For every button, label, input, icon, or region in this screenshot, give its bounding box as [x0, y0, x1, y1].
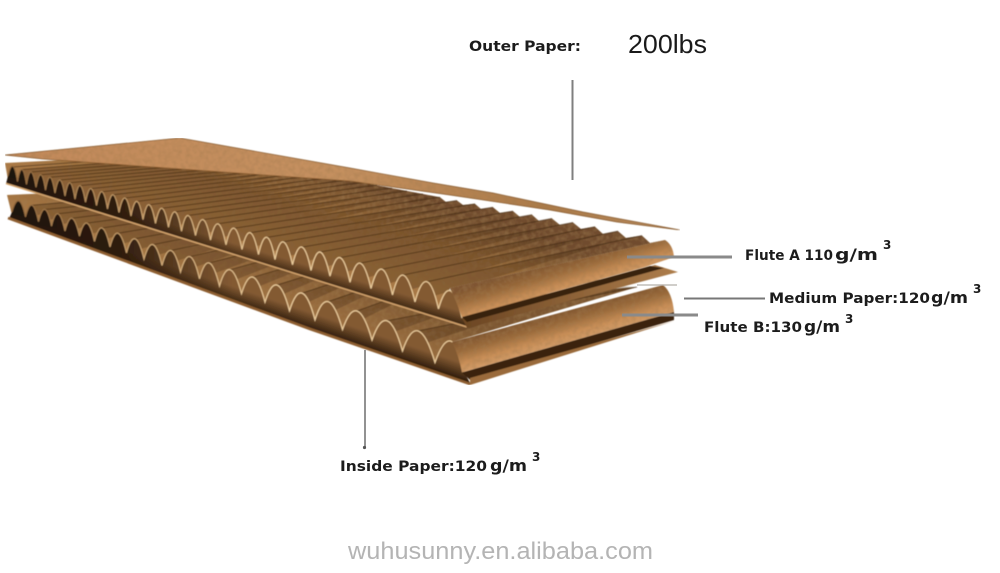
flute A end shadow — [462, 266, 664, 322]
medium paper front edge — [6, 184, 467, 327]
label: medium paper — [769, 282, 981, 307]
label: outer paper: Outer Paper: — [469, 39, 581, 55]
flute B inner cavities — [9, 201, 470, 383]
inside liner shadow — [462, 312, 674, 380]
upper flute A — [5, 153, 678, 328]
flute A inner cavities — [6, 166, 467, 326]
corrugated board illustration — [5, 138, 680, 385]
flute A end roll — [450, 240, 674, 317]
label: flute A: 3 — [883, 238, 891, 252]
flute A wave edge — [8, 166, 462, 318]
inside liner right edge — [470, 321, 674, 385]
flute B wave edge — [12, 201, 464, 372]
lower flute B — [7, 186, 674, 385]
outer paper sheet — [5, 138, 680, 230]
label: medium paper: g/m — [931, 288, 968, 307]
medium paper right wedge — [462, 265, 678, 328]
leader: flute A — [627, 256, 732, 258]
leader: flute B — [622, 314, 698, 316]
flute B ridge shading — [26, 187, 663, 362]
flute B crest lines — [32, 188, 637, 331]
inside liner front edge — [8, 218, 470, 384]
label: flute B: g/m — [804, 317, 840, 336]
label: flute B: Flute B:130 — [704, 320, 802, 336]
watermark: wuhusunny.en.alibaba.com — [347, 538, 653, 565]
label: inside paper: 3 — [532, 450, 540, 464]
label: medium paper: Medium Paper:120 — [769, 291, 930, 307]
flute A cavity shadow band — [6, 166, 467, 326]
flute B cavity shadow band — [9, 201, 470, 383]
flute A ridge surface — [5, 153, 665, 312]
label: inside paper: g/m — [490, 456, 527, 475]
label: flute A: g/m — [835, 245, 878, 264]
label: inside paper — [340, 450, 540, 475]
flute B end roll — [452, 285, 674, 372]
label: inside paper: Inside Paper:120 — [340, 459, 487, 475]
label: flute B — [704, 312, 853, 336]
leader: inside paper — [363, 350, 366, 449]
flute B ridge surface — [7, 186, 637, 365]
leader: medium paper — [637, 285, 765, 298]
leader: outer paper — [572, 80, 574, 180]
flute A ridge shading — [18, 154, 665, 309]
label: flute A — [745, 238, 891, 264]
label: medium paper: 3 — [973, 282, 981, 296]
label: flute B: 3 — [845, 312, 853, 326]
label: flute A: Flute A 110 — [745, 248, 833, 264]
value: 200lbs: 200lbs — [628, 29, 707, 59]
flute A crest lines — [13, 153, 642, 282]
